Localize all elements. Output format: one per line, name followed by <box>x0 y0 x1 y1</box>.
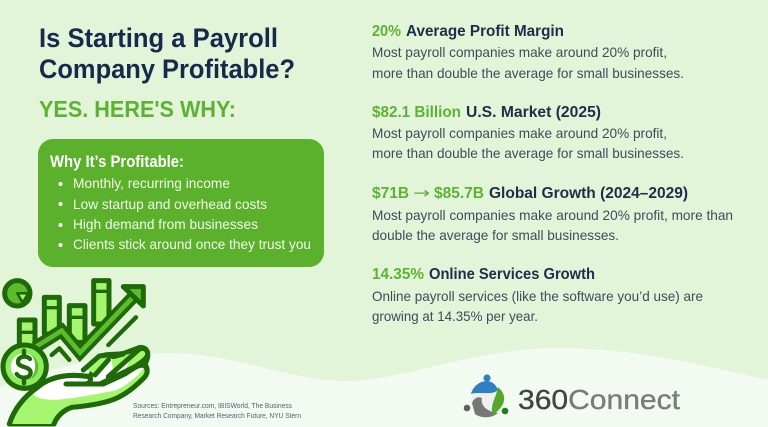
sources note: Sources: Entrepreneur.com, IBISWorld, The Business <box>133 401 292 410</box>
stat: profit margin: Average Profit Margin <box>406 23 564 40</box>
logo wordmark: 360Connect <box>518 384 680 415</box>
stat: online services growth: 14.35% <box>372 266 424 283</box>
panel heading: Why It’s Profitable: <box>50 153 184 171</box>
panel: why it's profitable <box>38 139 324 267</box>
sources note: Research Company, Market Research Future, NYU Stern <box>133 411 301 420</box>
stat: global growth: $85.7B <box>434 185 484 202</box>
icon: open hand <box>9 347 148 424</box>
stat: U.S. market: U.S. Market (2025) <box>466 104 601 121</box>
icon: dollar coin <box>3 345 46 388</box>
icon: bars <box>19 281 109 348</box>
stat: profit margin: more than double the average for small businesses. <box>372 65 684 81</box>
bullet list: Clients stick around once they trust you <box>73 236 311 252</box>
stat: U.S. market <box>372 104 684 161</box>
icon: growth arrow <box>35 287 143 360</box>
stat: profit margin: Most payroll companies make around 20% profit, <box>372 44 667 60</box>
stat: U.S. market: $82.1 Billion <box>372 104 461 121</box>
bullet list: Monthly, recurring income <box>73 175 230 191</box>
icon: pie chart <box>5 281 30 306</box>
sources note <box>133 401 301 420</box>
title <box>39 23 295 84</box>
stat: online services growth: growing at 14.35% per year. <box>372 308 538 324</box>
stat: online services growth: Online Services Growth <box>429 266 595 283</box>
icon: logo mark <box>464 374 508 417</box>
stat: online services growth <box>372 266 703 324</box>
logo: 360Connect <box>464 374 680 417</box>
stat: profit margin <box>372 23 684 81</box>
title: Company Profitable? <box>39 54 295 84</box>
stat: global growth <box>372 184 733 243</box>
stat: online services growth: Online payroll services (like the software you’d use) are <box>372 288 703 304</box>
subheading: yes, here's why: YES. HERE'S WHY: <box>39 96 236 122</box>
stat: global growth: Most payroll companies make around 20% profit, more than <box>372 207 733 223</box>
bullet list: High demand from businesses <box>73 216 258 232</box>
bullet list <box>58 175 311 252</box>
bullet list: Low startup and overhead costs <box>73 196 267 212</box>
stat: U.S. market: more than double the average for small businesses. <box>372 145 684 161</box>
stat: profit margin: 20% <box>372 23 401 40</box>
title: Is Starting a Payroll <box>39 23 278 53</box>
stat: global growth: → <box>413 184 430 202</box>
stat: global growth: $71B <box>372 185 409 202</box>
icon: hand holding coin and growth chart <box>3 281 148 424</box>
stat: U.S. market: Most payroll companies make around 20% profit, <box>372 125 667 141</box>
stat: global growth: double the average for small businesses. <box>372 227 619 243</box>
stat: global growth: Global Growth (2024–2029) <box>489 185 688 202</box>
